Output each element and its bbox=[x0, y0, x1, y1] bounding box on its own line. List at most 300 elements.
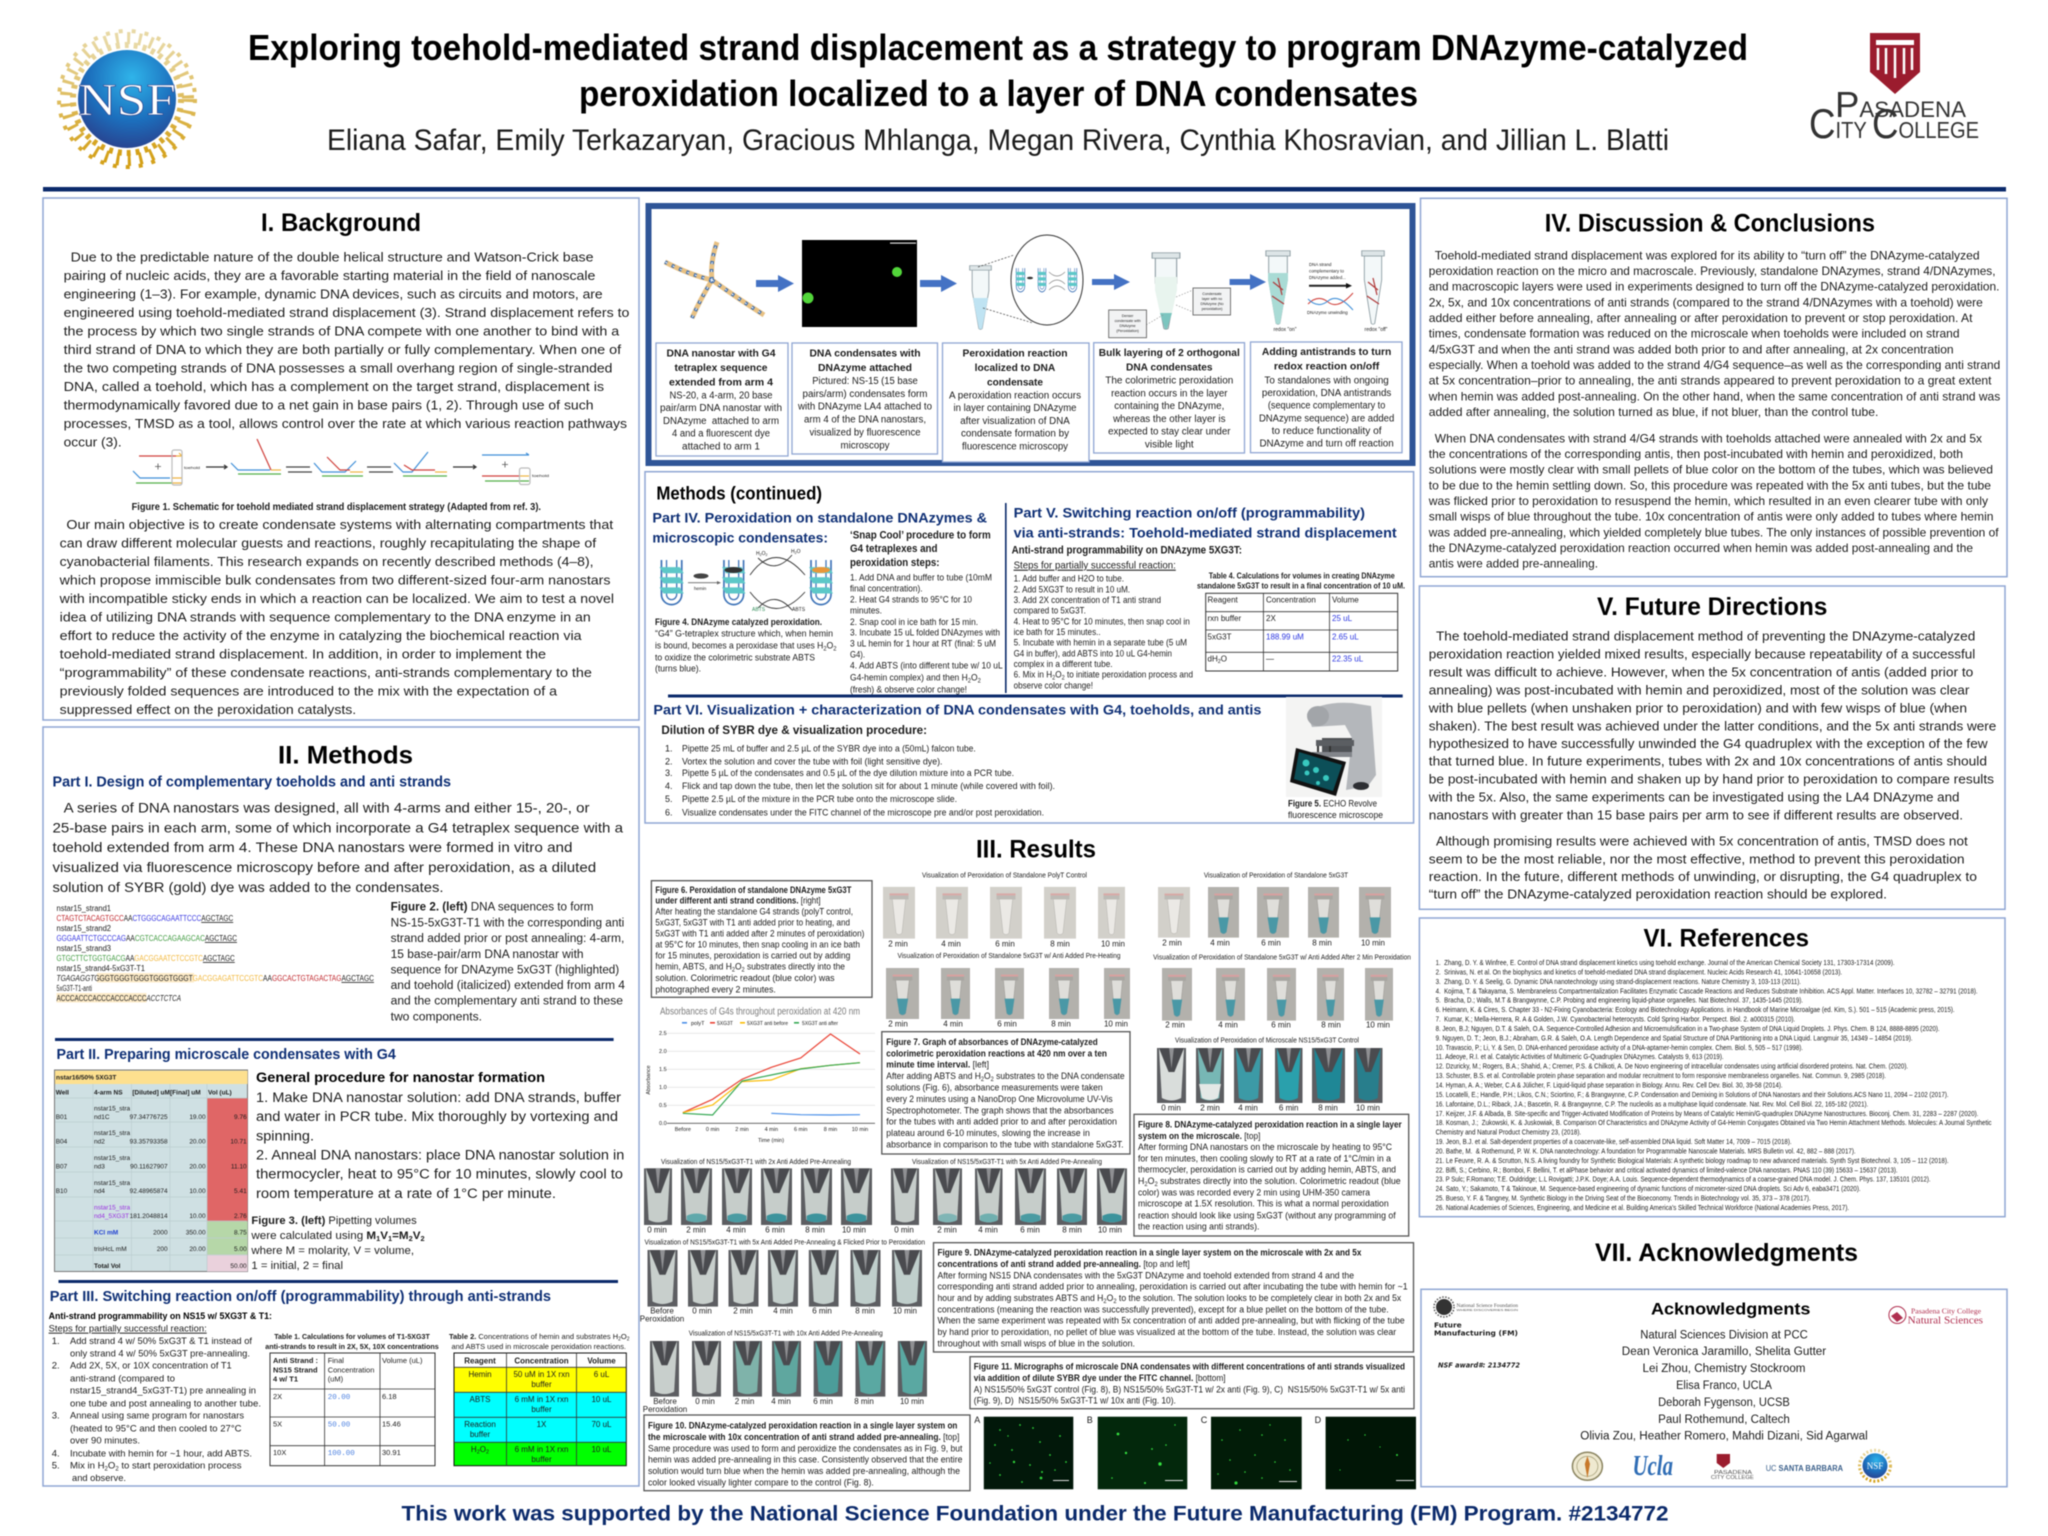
text block: future paragraph 1: peroxidation reaction yielded mixed results, especially because repeatability of a successful bbox=[1429, 648, 1975, 662]
text block: Part III steps: Anti-strand programmability on NS15 w/ 5XG3T & T1: bbox=[49, 1311, 272, 1322]
text: Future Manufacturing award: Future bbox=[1434, 1322, 1462, 1330]
arrow: step 3 bbox=[1092, 274, 1130, 290]
tube photos: 5x anti flicked: 4 min bbox=[773, 1306, 793, 1316]
image: redox on/off tubes: DNA strand bbox=[1309, 262, 1332, 267]
reference list: 23. P Sulc; F.Romano; T.E. Ouldridge; L.L Rovigatti; J.P.K. Doye; A.A. Louis. Sequence-dependent thermodynamics of a coarse-grained DNA model. J. Chem. Phys. 137, 135101 (2012). bbox=[1436, 1175, 1931, 1184]
text block: discussion paragraph 2: the DNAzyme-catalyzed peroxidation reaction occurred when hemin was added post-annealing and the bbox=[1429, 541, 1973, 555]
reference list: 10. Travascio, P.; Li, Y. & Sen, D. DNA-enhanced peroxidase activity of a DNA-aptamer-hemin complex. Chem. Biol. 5, 505 – 517 (1998). bbox=[1436, 1043, 1803, 1052]
caption: Figure 7: solutions (Fig. 6), absorbance measurements were taken bbox=[886, 1082, 1103, 1092]
table: Figure 3 pipetting volumes: 5.41 bbox=[234, 1188, 247, 1195]
text block: dilution procedure: Dilution of SYBR dye & visualization procedure: bbox=[661, 725, 927, 737]
text block: acknowledged names: Paul Rothemund, Caltech bbox=[1658, 1414, 1790, 1426]
text block: Part V steps: ice bath for 15 minutes.. bbox=[1014, 627, 1101, 638]
text block: general procedure: spinning. bbox=[256, 1128, 314, 1143]
table: Figure 3 pipetting volumes: 19.00 bbox=[189, 1114, 206, 1121]
micrograph D bbox=[1326, 1417, 1416, 1489]
text block: background paragraph 1: third strand of DNA to which they are both partially or fully complementary. When one of bbox=[64, 342, 622, 357]
tube photos: 10x anti pre-annealing: 6 min bbox=[813, 1397, 833, 1406]
logo: seal bbox=[1572, 1452, 1602, 1480]
image: redox on/off tubes: DNAzyme added... bbox=[1309, 275, 1346, 280]
caption: Figure 8: thermocycler, peroxidation is carried out by adding hemin, ABTS, and bbox=[1138, 1165, 1396, 1175]
tube photos: anti added pre-heating: Visualization of Peroxidation of Standalone 5xG3T w/ Anti Added Pre-Heating bbox=[898, 951, 1120, 960]
caption: Figure 8: substrates directly into the solution. Colorimetric readout (blue bbox=[1158, 1176, 1401, 1186]
text block: discussion paragraph 1: added after annealing, the solution turned as blue, if not bluer, than the control tube. bbox=[1429, 405, 1878, 419]
table: Figure 3 pipetting volumes: nstar15_stra bbox=[94, 1106, 131, 1113]
image: redox on/off tubes: redox "off" bbox=[1365, 327, 1388, 333]
text block: discussion paragraph 2: the concentrations of the corresponding antis, then post-incubated with hemin and peroxidized, both bbox=[1429, 447, 1963, 461]
tube photos: anti added pre-heating: 8 min bbox=[1051, 1020, 1071, 1028]
caption: Figure 3: 2 bbox=[409, 1236, 413, 1243]
subheading: Part IV bbox=[652, 510, 987, 546]
caption: Figure 6: 5xG3T, 5xG3T with T1 anti added prior to heating, and bbox=[655, 918, 850, 928]
reference list: 2. Srinivas, N. et al. On the biophysics and kinetics of toehold-mediated DNA strand displacement. Nucleic Acids Research 41, 10641-10658 (2013). bbox=[1436, 967, 1842, 976]
text: Future Manufacturing award: Manufacturing (FM) bbox=[1434, 1329, 1518, 1337]
legend: 5XG3T bbox=[717, 1021, 734, 1027]
caption: Figure 10 bbox=[644, 1415, 970, 1491]
caption: Figure 9: to the solution. The solution looks to be completely clear in both 2x and 5x bbox=[1117, 1293, 1402, 1303]
caption box 5: peroxidation, DNA antistrands bbox=[1262, 388, 1391, 399]
text block: Snap Cool procedure: (fresh) & observe color change! bbox=[850, 684, 967, 695]
tube photos: standalone 5xG3T: 4 min bbox=[1210, 938, 1230, 948]
tube photos: anti added pre-heating: 4 min bbox=[943, 1020, 963, 1028]
tube photos: microscale control: 4 min bbox=[1238, 1104, 1258, 1112]
caption: Figure 5 bbox=[1288, 799, 1383, 821]
table: Figure 3 pipetting volumes: 2000 bbox=[153, 1230, 168, 1237]
caption box 3: after visualization of DNA bbox=[960, 416, 1070, 427]
tube photos: 5x anti flicked: 10 min bbox=[893, 1306, 917, 1316]
text block: Part III steps: Steps for partially successful reaction: bbox=[49, 1324, 207, 1335]
caption: Figure 7 bbox=[882, 1032, 1130, 1154]
text block: general procedure: 1. Make DNA nanostar solution: add DNA strands, buffer bbox=[256, 1090, 622, 1105]
caption: Figure 10: Figure 10. DNAzyme-catalyzed peroxidation reaction in a single layer system on bbox=[648, 1421, 957, 1431]
table: Table 4 volumes: 2 bbox=[1218, 659, 1221, 665]
sequences: Figure 2: nstar15_strand4-5xG3T-T1 bbox=[56, 964, 146, 973]
tube photos: 10x anti pre-annealing bbox=[643, 1328, 927, 1414]
text block: dilution procedure: 4. bbox=[665, 781, 673, 791]
caption: Figure 3: where M = molarity, V = volume, bbox=[250, 1245, 414, 1257]
text block: Part V steps: 2. Add 5XG3T to result in 10 uM. bbox=[1014, 584, 1130, 595]
text block: background paragraph 1: processes, TMSD as a tool, allows control over the rate at which various reaction pathways bbox=[64, 416, 628, 431]
reference list: 11. Adeoye, R.I. et al. Catalytic Activities of Multimeric G-Quadruplex DNAzymes. Catalysts 9, 613 (2019). bbox=[1436, 1052, 1724, 1061]
caption box 1: 4 and a fluorescent dye bbox=[672, 429, 770, 440]
image: layered tube with callouts: DNAzyme (No bbox=[1201, 302, 1223, 306]
text block: Part III steps: 3. bbox=[52, 1411, 60, 1422]
caption box 3: A peroxidation reaction occurs bbox=[949, 390, 1081, 401]
subheading: Part VI: Part VI. Visualization + characterization of DNA condensates with G4, toeholds, and antis bbox=[653, 701, 1262, 717]
caption: Figure 4: to oxidize the colorimetric substrate ABTS bbox=[655, 652, 815, 663]
arrow: step 4 bbox=[1230, 274, 1266, 290]
text block: discussion paragraph 1: especially. When a toehold was added to the strand 4/G4 sequence–as well as the corresponding anti strand bbox=[1429, 358, 2000, 372]
text block: acknowledged names bbox=[1580, 1329, 1868, 1443]
text block: Part V steps: O bbox=[1055, 670, 1062, 681]
caption: Figure 7: minute time interval. [left] bbox=[886, 1060, 989, 1070]
table: Table 4 volumes: Table 4. Calculations for volumes in creating DNAzyme bbox=[1209, 572, 1395, 581]
text block: discussion paragraph 1 bbox=[1428, 248, 2000, 419]
text block: Part I body: visualized via fluorescence microscopy before and after peroxidation, as a diluted bbox=[52, 859, 596, 875]
caption box 4: Bulk layering of 2 orthogonal bbox=[1099, 348, 1240, 359]
caption: Figure 4: O bbox=[827, 641, 833, 652]
caption box 4: visible light bbox=[1145, 439, 1194, 450]
heading: Acknowledgments inner: Acknowledgments bbox=[1651, 1299, 1810, 1318]
text block: dilution procedure: Pipette 5 µL of the condensates and 0.5 µL of the dye dilution mixture into a PCR tube. bbox=[682, 768, 1014, 778]
caption box 3 bbox=[942, 343, 1089, 462]
chart: absorbance over time: 8 min bbox=[824, 1127, 837, 1133]
table: Table 4 volumes: 22.35 uL bbox=[1332, 655, 1364, 664]
subheading: Part IV: microscopic condensates: bbox=[652, 530, 828, 546]
text block: Part V steps: observe color change! bbox=[1014, 680, 1093, 691]
caption box 4 bbox=[1094, 343, 1244, 453]
text block: background paragraph 1: engineered using toehold-mediated strand displacement (3). Strand displacement refers to bbox=[64, 305, 629, 320]
text block: Snap Cool procedure: 2 bbox=[968, 678, 971, 685]
table: Table 4 volumes: rxn buffer bbox=[1208, 614, 1241, 623]
table: Table 1 volumes: 5X bbox=[273, 1420, 282, 1429]
logo: PCC Natural Sciences: Natural Sciences bbox=[1908, 1314, 1983, 1326]
text block: Part V steps: Steps for partially successful reaction: bbox=[1014, 560, 1176, 572]
caption box 1: DNAzyme attached to arm bbox=[663, 416, 779, 427]
text block: background paragraph 1: DNA, called a toehold, which has a complement on the target strand, displacement is bbox=[64, 379, 605, 394]
caption box 1: tetraplex sequence bbox=[674, 363, 768, 374]
table: Table 2 reagents: buffer bbox=[531, 1380, 552, 1389]
text block: Part V steps: 3. Add 2X concentration of T1 anti strand bbox=[1014, 595, 1161, 606]
text block: Part III steps: one tube and post annealing to another tube. bbox=[70, 1398, 261, 1409]
text block: Snap Cool procedure bbox=[850, 530, 1003, 695]
text block: background paragraph 1: Due to the predictable nature of the double helical structure and Watson-Crick base bbox=[71, 249, 593, 264]
heading: Discussion: IV. Discussion & Conclusions bbox=[1545, 210, 1875, 238]
table: Figure 3 pipetting volumes: 93.35793358 bbox=[130, 1139, 168, 1146]
text block: Part III steps: Incubate with hemin for ~1 hour, add ABTS. bbox=[70, 1448, 252, 1459]
reference list: 14. Hyman, A. A.; Weber, C.A & Jülicher, F. Liquid-liquid phase separation in Biology. Annu. Rev. Cell Dev. Biol. 30, 39-58 (2014). bbox=[1436, 1080, 1783, 1090]
text block: future paragraph 1: that turned blue. In future experiments, tubes with 2x and 10x concentrations of antis should bbox=[1429, 755, 1987, 769]
text block: Part III steps: 2. bbox=[52, 1361, 60, 1372]
title: peroxidation localized to a layer of DNA condensates bbox=[579, 73, 1418, 114]
heading: Methods continued: Methods (continued) bbox=[656, 483, 822, 503]
text block: Part V steps: compared to 5xG3T. bbox=[1014, 606, 1086, 617]
table: Table 2 reagents: Concentration bbox=[514, 1356, 569, 1366]
table: Table 2 reagents: 2 bbox=[618, 1336, 621, 1342]
text block: background paragraph 2: previously folded sequences are introduced to the mix with the expectation of a bbox=[60, 684, 558, 699]
table: Table 1 volumes: 20.00 bbox=[328, 1394, 351, 1402]
text block: background paragraph 2: which propose immiscible bulk condensates from two different-sized four-arm nanostars bbox=[59, 573, 611, 588]
text block: future paragraph 2: “turn off” the DNAzyme-catalyzed peroxidation reaction should be explored. bbox=[1429, 888, 1887, 902]
chart: absorbance over time: 6 min bbox=[794, 1127, 807, 1133]
caption box 2: DNAzyme attached bbox=[818, 363, 912, 374]
caption: Figure 5: fluorescence microscope bbox=[1288, 810, 1383, 821]
text block: discussion paragraph 2: was added pre-annealing, which yielded completely blue tubes. The only instances of possible prevention of bbox=[1428, 525, 1999, 539]
caption box 5: DNAzyme and turn off reaction bbox=[1259, 439, 1394, 450]
text block: Snap Cool procedure: G4-hemin complex) and then H bbox=[850, 673, 982, 684]
caption box 3: condensate formation by bbox=[961, 429, 1069, 440]
tube photos: 2x anti pre-annealing: 8 min bbox=[805, 1226, 825, 1234]
table: Table 1 volumes: 10X bbox=[273, 1448, 286, 1457]
image: DNA nanostar bbox=[665, 242, 764, 318]
table: Figure 3 pipetting volumes: 10.00 bbox=[189, 1188, 206, 1195]
text block: discussion paragraph 1: 2x, 5x, and 10x concentrations of anti strands (compared to the strand 4/DNAzymes with a toehold) were bbox=[1429, 295, 1983, 309]
arrow: step 2 bbox=[920, 275, 957, 292]
text block: future paragraph 1: with blue pellets (when unshaken prior to peroxidation) and with few wisps of blue (when bbox=[1428, 701, 1967, 715]
tube photos: standalone 5xG3T: 8 min bbox=[1312, 938, 1332, 948]
caption box 4: The colorimetric peroxidation bbox=[1105, 376, 1233, 387]
tube photos: microscale control: 2 min bbox=[1200, 1104, 1220, 1112]
authors: Eliana Safar, Emily Terkazaryan, Gracious Mhlanga, Megan Rivera, Cynthia Khosravian, and Jillian L. Blatti bbox=[327, 124, 1669, 157]
text block: discussion paragraph 2 bbox=[1428, 431, 1999, 571]
tube photos: 2x anti pre-annealing: 0 min bbox=[647, 1226, 667, 1234]
table: Figure 3 pipetting volumes: 97.34776725 bbox=[130, 1114, 168, 1121]
table: Table 1 volumes: Table 1. Calculations for volumes of T1-5XG3T bbox=[274, 1332, 430, 1341]
caption: Figure 9 bbox=[934, 1243, 1414, 1352]
reference list: 3. Zhang, D. Y. & Seelig, G. Dynamic DNA nanotechnology using strand-displacement reactions. Nature Chemistry 3, 103-113 (2011). bbox=[1436, 977, 1801, 986]
text block: Part V steps: complex in a different tube. bbox=[1014, 659, 1113, 670]
text block: Part III steps: Add strand 4 w/ 50% 5xG3T & T1 instead of bbox=[70, 1336, 252, 1347]
table: Figure 3 pipetting volumes: 92.48965874 bbox=[130, 1188, 168, 1195]
text block: dilution procedure: 5. bbox=[665, 794, 673, 804]
image: ECHO Revolve microscope bbox=[1286, 697, 1382, 797]
reference list: 19. Jeon, B.J. et al. Salt-dependent properties of a coacervate-like, self-assembled DNA liquid. Soft Matter 14, 7009 – 7015 (2018). bbox=[1436, 1137, 1792, 1146]
text block: Part III steps: only strand 4 w/ 50% 5xG3T pre-annealing. bbox=[70, 1348, 250, 1359]
table: Figure 3 pipetting volumes: 10.00 bbox=[189, 1213, 206, 1220]
table: Table 2 reagents: 1X bbox=[537, 1420, 547, 1429]
table: Table 4 volumes bbox=[1197, 572, 1405, 671]
caption: Figure 11: via addition of dilute SYBR dye under the FITC channel. [bottom] bbox=[974, 1373, 1226, 1383]
table: Figure 3 pipetting volumes: 11.10 bbox=[231, 1164, 247, 1171]
table: Table 4 volumes: O bbox=[1221, 655, 1227, 664]
caption: Figure 6 bbox=[651, 881, 872, 997]
table: Figure 3 pipetting volumes: 20.00 bbox=[189, 1139, 206, 1146]
text block: Part I body: 25-base pairs in each arm, some of which incorporate a G4 tetraplex sequence with a bbox=[52, 820, 623, 836]
table: Table 2 reagents: 6 mM in 1X rxn bbox=[515, 1395, 568, 1404]
text block: Part III steps bbox=[49, 1311, 272, 1484]
chart: absorbance over time: Absorbances of G4s throughout peroxidation at 420 nm bbox=[660, 1006, 860, 1017]
table: Figure 3 pipetting volumes: 20.00 bbox=[189, 1164, 206, 1171]
caption: Figure 8: reaction should look like using 5xG3T (without any programming of bbox=[1138, 1210, 1396, 1220]
text block: future paragraph 2: reaction. In the future, different methods of unwinding, or disrupting, the G4 quadruplex to bbox=[1429, 870, 1977, 884]
caption box 1: attached to arm 1 bbox=[682, 442, 760, 453]
caption box 2: visualized by fluorescence bbox=[810, 427, 921, 438]
header rule bbox=[43, 187, 2006, 192]
caption box 1: extended from arm 4 bbox=[669, 377, 773, 388]
diagram: Figure 1 toehold schematic bbox=[133, 439, 549, 485]
caption: Figure 6: at 95°C for 10 minutes, then snap cooling in an ice bath bbox=[655, 939, 860, 949]
caption: Figure 7: 2 bbox=[981, 1077, 985, 1083]
chart: absorbance over time: 2 min bbox=[735, 1127, 749, 1133]
reference list bbox=[1436, 958, 1992, 1212]
text block: background paragraph 2: suppressed effect on the peroxidation catalysts. bbox=[60, 702, 356, 717]
caption box 1: DNA nanostar with G4 bbox=[666, 349, 776, 360]
caption: Figure 8: 2 bbox=[1144, 1182, 1148, 1188]
micrograph C bbox=[1211, 1417, 1302, 1489]
caption: Figure 3: 1 bbox=[388, 1236, 392, 1243]
caption: Figure 8: for ten minutes, then cooling slowly to RT at a rate of 1°C/min in a bbox=[1138, 1153, 1391, 1163]
table: Table 1 volumes: 30.91 bbox=[382, 1448, 401, 1457]
text block: future paragraph 1: hypothesized to have successfully unwinded the G4 quadruplex with the exception of the few bbox=[1429, 737, 1989, 751]
caption: Figure 4 bbox=[655, 617, 837, 675]
text block: dilution procedure: Visualize condensates under the FITC channel of the microscope pre and/or post peroxidation. bbox=[682, 807, 1044, 817]
table: Table 1 volumes: Final bbox=[328, 1356, 344, 1365]
diagram: Figure 4 DNAzyme cycle: O bbox=[797, 549, 801, 555]
caption box 1: NS-20, a 4-arm, 20 base bbox=[670, 390, 773, 401]
text: Future Manufacturing award: NSF award#: 2134772 bbox=[1438, 1362, 1520, 1370]
caption box 2: with DNAzyme LA4 attached to bbox=[797, 402, 932, 413]
table: Figure 3 pipetting volumes: nstar15_stra bbox=[94, 1155, 131, 1162]
table: Figure 3 pipetting volumes: nd3 bbox=[94, 1164, 105, 1171]
micrographs: Figure 11 A-D: A bbox=[974, 1415, 980, 1425]
text block: Part III steps: 4. bbox=[52, 1448, 60, 1459]
table: Figure 3 pipetting volumes: 200 bbox=[157, 1246, 168, 1253]
caption: Figure 3: 2 bbox=[420, 1236, 425, 1243]
tube photos: 5x anti pre-annealing: 2 min bbox=[937, 1226, 957, 1234]
image: redox on/off tubes: DNAzyme unwinding bbox=[1307, 310, 1348, 315]
text block: discussion paragraph 1: Toehold-mediated strand displacement was explored for its ability to “turn off” the DNAzyme-catalyzed bbox=[1435, 248, 1980, 262]
caption box 5: redox reaction on/off bbox=[1274, 361, 1380, 372]
table: Figure 3 pipetting volumes: nd1C bbox=[94, 1114, 110, 1121]
table: Table 1 volumes: 50.00 bbox=[328, 1422, 351, 1430]
image: layered tube with callouts: Condensate bbox=[1202, 292, 1222, 296]
reference list: 1. Zhang, D. Y. & Winfree, E. Control of DNA strand displacement kinetics using toehold exchange. Journal of the American Chemical Society 131, 17303-17314 (2009). bbox=[1436, 958, 1895, 967]
text: Future Manufacturing award bbox=[1434, 1322, 1520, 1370]
diagram: Figure 4 DNAzyme cycle: H bbox=[756, 551, 760, 557]
diagram: Figure 4 DNAzyme cycle: ABTS bbox=[752, 607, 766, 613]
tube photos: 5x anti flicked bbox=[640, 1238, 925, 1324]
table: Figure 3 pipetting volumes: 90.11627907 bbox=[130, 1164, 168, 1171]
text block: Snap Cool procedure: 3. Incubate 15 uL folded DNAzymes with bbox=[850, 628, 1000, 639]
sequences: Figure 2 bbox=[56, 904, 374, 1003]
caption: Figure 3: were calculated using M bbox=[251, 1230, 376, 1242]
caption: Figure 4: (turns blue). bbox=[655, 664, 701, 675]
table: Table 2 reagents: 2 bbox=[486, 1450, 489, 1456]
chart: absorbance over time: Before bbox=[675, 1127, 691, 1133]
text block: discussion paragraph 1: times, condensate formation was reduced on the microscale when toeholds were included on strand bbox=[1429, 327, 1960, 341]
table: Figure 3 pipetting volumes: trisHcL mM bbox=[94, 1246, 127, 1253]
table: Figure 3 pipetting volumes: B10 bbox=[56, 1188, 68, 1195]
text block: Part III steps: 5. bbox=[52, 1461, 60, 1472]
caption: Figure 7: Figure 7. Graph of absorbances of DNAzyme-catalyzed bbox=[886, 1037, 1098, 1047]
tube photos: anti added pre-heating: 10 min bbox=[1104, 1020, 1128, 1028]
text block: background paragraph 1: pairing of nucleic acids, they are a favorable starting material in the field of nanoscale bbox=[64, 268, 595, 283]
chart: absorbance over time: 1.0 bbox=[659, 1085, 667, 1091]
micrographs: Figure 11 A-D: B bbox=[1087, 1415, 1093, 1425]
text block: Part III steps: Anneal using same program for nanostars bbox=[70, 1411, 244, 1422]
text block: discussion paragraph 1: when hemin was added post-annealing. On the other hand, when the same concentration of anti strand was bbox=[1428, 389, 2000, 403]
text block: background paragraph 2: toehold-mediated strand displacement. In addition, in order to implement the bbox=[60, 647, 546, 662]
tube photos: 10x anti pre-annealing: 10 min bbox=[900, 1397, 924, 1406]
heading: Future Directions: V. Future Directions bbox=[1597, 593, 1827, 621]
legend: polyT bbox=[691, 1021, 705, 1027]
caption: Figure 10: color looked visually lighter compare to the control (Fig. 8). bbox=[648, 1477, 874, 1487]
logo: Pasadena City College bbox=[1809, 33, 1979, 147]
panel: I. Background bbox=[43, 198, 639, 720]
tube photos: 10x anti pre-annealing: 2 min bbox=[735, 1397, 754, 1406]
table: Table 2 reagents: 10 uL bbox=[591, 1395, 612, 1404]
text block: Part V steps: 6. Mix in H bbox=[1014, 670, 1058, 681]
text block: discussion paragraph 1: at 5x concentration–prior to annealing, the anti strands appeared to prevent peroxidation to a great extent bbox=[1429, 374, 1992, 388]
text block: Part III steps: (heated to 95°C and then cooled to 27°C bbox=[70, 1423, 242, 1434]
sequences: Figure 2: 5xG3T-T1-anti bbox=[56, 984, 92, 993]
subheading: Part II: Part II. Preparing microscale condensates with G4 bbox=[56, 1046, 396, 1063]
text block: dilution procedure: Pipette 2.5 µL of the mixture in the PCR tube onto the microscope slide. bbox=[682, 794, 957, 804]
table: Figure 3 pipetting volumes: 50.00 bbox=[230, 1263, 247, 1270]
table: Table 2 reagents: O bbox=[480, 1445, 486, 1454]
text block: acknowledged names: Lei Zhou, Chemistry Stockroom bbox=[1642, 1363, 1806, 1375]
tube photos: 10x anti pre-annealing: Before bbox=[653, 1397, 677, 1406]
table: Figure 3 pipetting volumes: Well bbox=[56, 1090, 69, 1097]
logo: UCLA: Ucla bbox=[1632, 1450, 1673, 1482]
text block: future paragraph 2: Although promising results were achieved with 5x concentration of antis, TMSD does not bbox=[1436, 834, 1968, 848]
logo: NSF small text: National Science Foundation bbox=[1456, 1304, 1519, 1309]
table: Table 4 volumes: 2.65 uL bbox=[1332, 632, 1359, 641]
caption: Figure 9: When the same experiment was repeated with 5x concentration of anti added pre-annealing, but with flicking of the tube bbox=[938, 1316, 1405, 1326]
caption box 3: fluorescence microscopy bbox=[962, 442, 1068, 453]
caption: Figure 8: the reaction using anti strands). bbox=[1138, 1222, 1259, 1232]
tube photos: microscale control: 10 min bbox=[1356, 1104, 1380, 1112]
table: Table 4 volumes: Concentration bbox=[1266, 596, 1316, 605]
table: Table 2 reagents: H bbox=[471, 1445, 477, 1454]
tube photos: 2x anti pre-annealing: 2 min bbox=[686, 1226, 706, 1234]
caption: Figure 9: 2 bbox=[1103, 1299, 1107, 1305]
tube photos: microscale control: 8 min bbox=[1318, 1104, 1338, 1112]
tube photos: PolyT control bbox=[883, 871, 1125, 948]
text block: Part V steps: 2 bbox=[1062, 675, 1065, 682]
reference list: 21. Le Feuvre, R. A. & Scrutton, N.S. A living foundry for Synthetic Biological Materials: A synthetic biology roadmap to new advanced materials. Synth Syst Biotechnol. 3, 105 – 112 (2018). bbox=[1436, 1156, 1949, 1165]
table: Figure 3 pipetting volumes: 181.2048814 bbox=[130, 1213, 168, 1220]
table: Figure 3 pipetting volumes: nstar15_stra bbox=[94, 1130, 131, 1137]
tube photos: PolyT control: Visualization of Peroxidation of Standalone PolyT Control bbox=[922, 871, 1087, 880]
diagram: Figure 4 DNAzyme cycle: ABTS bbox=[792, 607, 806, 613]
table: Table 2 reagents: Table 2. Concentrations of hemin and substrates H bbox=[449, 1332, 618, 1341]
caption: Figure 7: plateau around 6-10 minutes, slowing the increase in bbox=[886, 1128, 1090, 1138]
text block: dilution procedure: 2. bbox=[665, 757, 673, 767]
table: Figure 3 pipetting volumes: B04 bbox=[56, 1139, 68, 1146]
text block: background paragraph 2: idea of utilizing DNA strands with sequence complementary to the DNA enzyme in an bbox=[60, 610, 591, 625]
text block: Part V steps: G4 in buffer), add ABTS into 10 uL G4-hemin bbox=[1014, 648, 1172, 659]
chart: absorbance over time: 2.5 bbox=[659, 1031, 667, 1037]
tube photos: PolyT control: 6 min bbox=[995, 940, 1015, 948]
panel: overview workflow bbox=[648, 206, 1412, 463]
text block: general procedure: General procedure for nanostar formation bbox=[256, 1069, 545, 1085]
text block: Snap Cool procedure: peroxidation steps: bbox=[850, 557, 940, 569]
caption: Figure 8: H bbox=[1138, 1176, 1144, 1186]
table: Figure 3 pipetting volumes: B07 bbox=[56, 1164, 68, 1171]
tube photos: 5x anti pre-annealing: 6 min bbox=[1020, 1226, 1040, 1234]
text block: background paragraph 2: Our main objective is to create condensate systems with alternating compartments that bbox=[66, 517, 614, 532]
text block: Part V steps: to initiate peroxidation process and bbox=[1065, 670, 1193, 681]
diagram: Figure 4 DNAzyme cycle: 2 bbox=[760, 553, 762, 557]
caption: Figure 6: substrates directly into the bbox=[745, 961, 845, 971]
caption box 5 bbox=[1250, 342, 1402, 453]
caption: Figure 2: two components. bbox=[391, 1011, 482, 1023]
text block: background paragraph 1: engineering (1–3). For example, dynamic DNA devices, such as circuits and motors, are bbox=[64, 286, 603, 301]
text block: Part III steps: nstar15_strand4_5xG3T-T1) pre annealing in bbox=[70, 1386, 256, 1397]
tube photos: anti added after 2 min: 6 min bbox=[1271, 1020, 1291, 1030]
text block: background paragraph 1: the two competing strands of DNA possesses a small overhang region of single-stranded bbox=[64, 360, 612, 376]
caption: Figure 5: Figure 5. ECHO Revolve bbox=[1288, 799, 1377, 810]
heading: Background: I. Background bbox=[261, 209, 421, 237]
caption box 1 bbox=[656, 343, 788, 456]
panel: IV. Discussion & Conclusions bbox=[1420, 198, 2007, 577]
image: layered tube with callouts bbox=[1109, 253, 1230, 338]
tube photos: 2x anti pre-annealing bbox=[644, 1157, 872, 1234]
tube photos: anti added after 2 min: Visualization of Peroxidation of Standalone 5xG3T w/ Anti Added After 2 Min Peroxidation bbox=[1153, 952, 1411, 961]
text block: future paragraph 1 bbox=[1428, 630, 1996, 822]
reference list: 26. National Academies of Sciences, Engineering, and Medicine et al. Building America's Skilled Technical Workforce (National Academies Press, 2017). bbox=[1436, 1203, 1849, 1212]
tube photos: PolyT control: 4 min bbox=[941, 940, 961, 948]
subheading: Part V: via anti-strands: Toehold-mediated strand displacement bbox=[1014, 524, 1397, 540]
caption: Figure 2: strand added prior or post annealing: 4-arm, bbox=[391, 933, 624, 945]
caption: Figure 7: Spectrophotometer. The graph shows that the absorbances bbox=[886, 1105, 1114, 1115]
text block: Snap Cool procedure: ‘Snap Cool’ procedure to form bbox=[850, 530, 991, 542]
caption: Figure 7: every 2 minutes using a NanoDrop One Microvolume UV-Vis bbox=[886, 1094, 1113, 1104]
table: Figure 3 pipetting volumes: nstar15_stra bbox=[94, 1205, 131, 1212]
table: Table 2 reagents: 6 mM in 1X rxn bbox=[515, 1445, 568, 1454]
caption: Figure 6: solution. Colorimetric readout (blue color) was bbox=[655, 973, 835, 983]
